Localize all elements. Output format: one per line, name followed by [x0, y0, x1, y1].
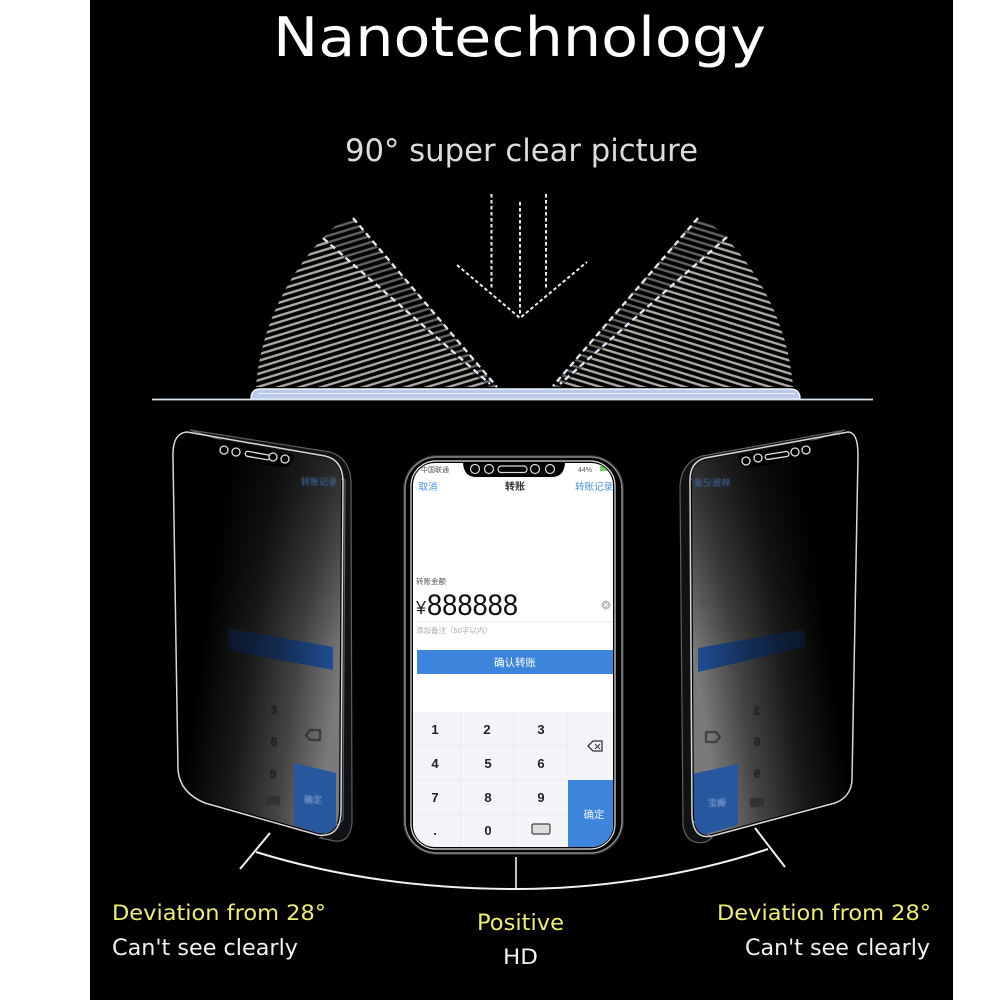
- notch with sensors: [738, 441, 817, 468]
- center phone: clear view: [403, 455, 624, 855]
- phone frame: [403, 455, 624, 855]
- keypad: 4: [431, 756, 439, 771]
- darkened screen: 确定: [304, 794, 322, 805]
- right caption: Can't see clearly: [745, 936, 930, 961]
- darkened screen: 转账记录: [301, 476, 337, 487]
- screen content: 中国联通: [421, 465, 449, 474]
- center caption: HD: [503, 945, 538, 969]
- screen content: ¥: [415, 598, 427, 618]
- keypad: 3: [537, 722, 545, 737]
- phone body: [680, 430, 845, 843]
- title: Nanotechnology: [273, 6, 766, 69]
- keypad: 确定: [584, 808, 605, 821]
- darkened screen: 9: [270, 767, 277, 781]
- screen content: 取消: [418, 481, 438, 493]
- screen content: 转账记录: [575, 481, 613, 493]
- darkened screen: 6: [271, 735, 278, 749]
- screen content: [413, 463, 613, 847]
- screen surface bar: [152, 389, 873, 400]
- left phone: privacy view: [170, 430, 352, 841]
- screen content: 44%: [578, 467, 592, 474]
- darkened screen: 确定: [708, 797, 726, 808]
- darkened screen: 9: [753, 767, 760, 781]
- right caption: Deviation from 28°: [717, 901, 931, 926]
- left caption: Deviation from 28°: [112, 901, 326, 926]
- darkened screen: 3: [753, 704, 760, 718]
- right phone: privacy view: [680, 430, 860, 843]
- phone body: [190, 430, 352, 841]
- darkened screen: 3: [271, 703, 278, 717]
- subtitle: 90° super clear picture: [345, 133, 698, 169]
- screen content: 添加备注（50字以内）: [416, 625, 492, 635]
- keypad: 9: [537, 790, 545, 805]
- darkened screen: [196, 438, 341, 834]
- keypad: 0: [484, 823, 492, 838]
- keypad: 5: [484, 756, 492, 771]
- center caption: Positive: [477, 911, 564, 936]
- keypad: 2: [483, 722, 491, 737]
- keypad: 1: [431, 722, 439, 737]
- glass outline: [173, 432, 343, 835]
- notch with sensors: [463, 463, 565, 477]
- diagram: viewing angle fans: [152, 194, 873, 400]
- left caption: Can't see clearly: [112, 936, 298, 961]
- angle arc with ticks: [240, 828, 785, 889]
- darkened screen: 转账记录: [694, 477, 730, 488]
- glass outline: [690, 432, 858, 837]
- darkened screen: 6: [753, 735, 760, 749]
- keypad: 6: [537, 756, 545, 771]
- right caption: [717, 901, 931, 961]
- darkened screen: [692, 439, 836, 835]
- screen content: 确认转账: [494, 656, 536, 669]
- keypad: 8: [484, 790, 492, 805]
- screen content: 转账: [505, 480, 525, 493]
- dashed down arrow: [457, 194, 587, 318]
- keypad: .: [433, 823, 437, 838]
- screen content: 888888: [427, 589, 518, 622]
- keypad: 7: [431, 790, 439, 805]
- notch with sensors: [214, 441, 294, 467]
- right striped fan: [552, 218, 793, 387]
- center caption: [477, 911, 564, 969]
- left caption: [112, 901, 326, 961]
- left striped fan: [256, 218, 497, 387]
- screen content: 转账金额: [416, 576, 446, 586]
- keypad: [413, 712, 613, 847]
